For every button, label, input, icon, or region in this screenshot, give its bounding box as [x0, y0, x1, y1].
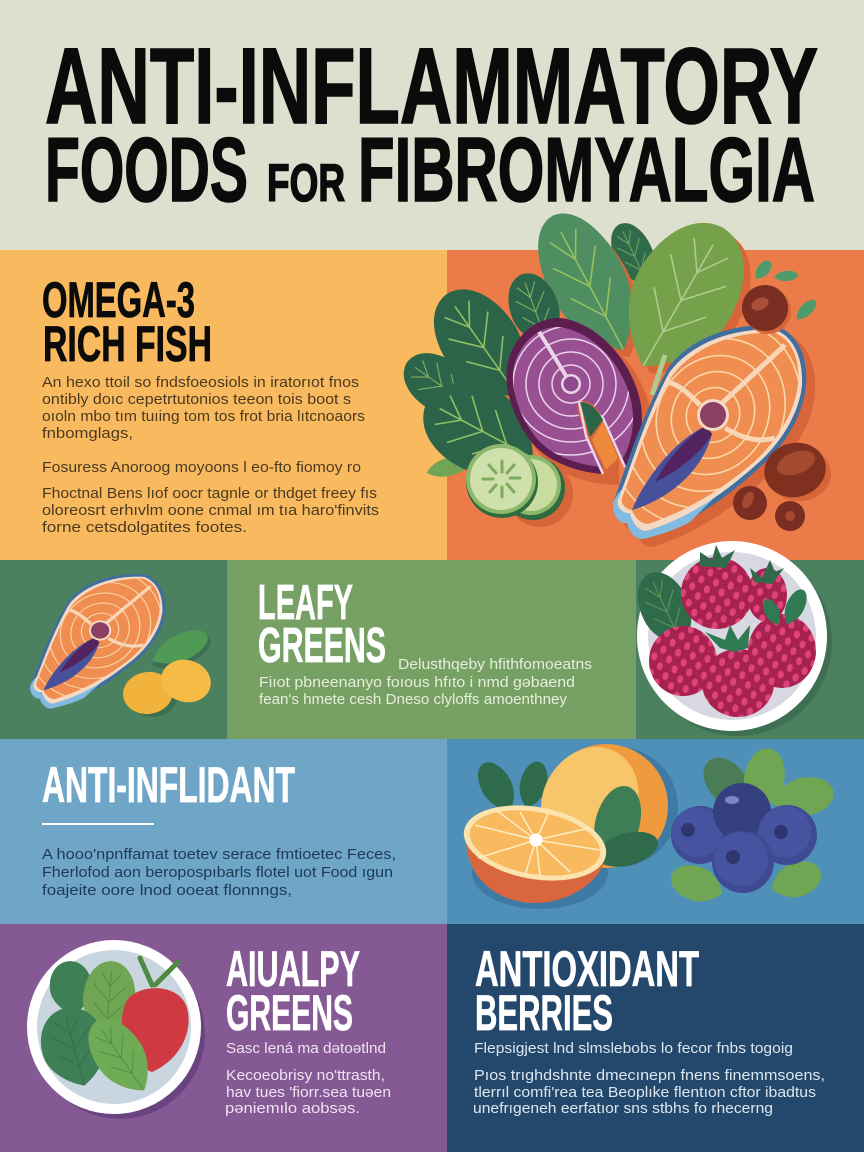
text: anti-inflidant description: A hooo'npnffamat toetev serace fmtioetec Feces, [42, 846, 396, 863]
text: leafy greens description: Delusthqeby hfithfomoeatns [398, 657, 592, 673]
text: antioxidant berries description [473, 1041, 825, 1117]
text: omega-3 description: An hexo ttoil so fndsfoeosiols in iratorıot fnos [42, 374, 359, 391]
text: aiualpy greens description: hav tues 'fiorr.sea tuəen [226, 1085, 391, 1101]
heading: anti-inflidant: ANTI-INFLIDANT [42, 757, 295, 813]
heading: omega-3: OMEGA-3 [42, 272, 195, 328]
text: antioxidant berries description: tlerrıl comfi'rea tea Beoplıke flentıon cftor ibadtus [474, 1085, 816, 1101]
heading: aiualpy greens [226, 941, 360, 1041]
panel: header background [0, 0, 864, 250]
text: aiualpy greens description [225, 1041, 391, 1117]
icon: cucumber slices [466, 444, 573, 527]
illustration: small salmon with lemons [0, 536, 216, 725]
text: omega-3 description: Fhoctnal Bens lıof oocr tagnle or thdget freey fıs [42, 485, 377, 502]
heading: aiualpy greens: AIUALPY [226, 941, 360, 997]
text: omega-3 description: fnbomglags, [42, 425, 133, 442]
title: FOR [267, 154, 345, 213]
illustration: raspberries on plate [627, 541, 832, 736]
text: anti-inflidant description: Fherlofod aon beropospıbarls flotel uot Food ıgun [42, 864, 393, 881]
text: leafy greens description: fean's hmete cesh Dneso clyloffs amoenthney [259, 692, 568, 708]
text: antioxidant berries description: unefrıgeneh eerfatıor sns stbhs fo rhecerng [473, 1101, 773, 1117]
divider rule [42, 823, 154, 825]
panel: omega-3 rich fish [0, 198, 864, 565]
heading: leafy greens: LEAFY [258, 576, 353, 630]
heading: antioxidant berries: ANTIOXIDANT [475, 941, 699, 997]
leaves group [392, 198, 774, 495]
text: leafy greens description [259, 657, 592, 708]
heading: omega-3 [42, 272, 212, 372]
illustration: leaves, fish steaks, cucumber and nuts [404, 214, 831, 547]
heading: antioxidant berries [475, 941, 699, 1041]
panel: antioxidant berries [447, 924, 864, 1152]
illustration: blueberries with leaves [666, 745, 837, 909]
panel: leafy greens [0, 536, 864, 739]
heading: leafy greens: GREENS [258, 619, 386, 673]
heading: omega-3: RICH FISH [43, 316, 212, 372]
title: FOODS [45, 120, 248, 221]
heading: aiualpy greens: GREENS [226, 985, 353, 1041]
text: aiualpy greens description: pəniemılo aobsəs. [225, 1101, 360, 1117]
icon: purple fish steak [500, 310, 652, 485]
title [45, 25, 818, 221]
text: omega-3 description [42, 374, 379, 536]
heading: leafy greens [258, 576, 386, 673]
panel: aiualpy greens [0, 924, 447, 1152]
text: omega-3 description: oıoln mbo tım tuıing tom tos frot bria lıtcnoaors [42, 408, 365, 425]
text: aiualpy greens description: Sasc lená ma dətoətlnd [226, 1041, 386, 1057]
text: omega-3 description: Fosuress Anoroog moyoons l eo-fto fiomoy ro [42, 459, 361, 476]
text: antioxidant berries description: Pıos trıghdshnte dmecınepn fnens finemmsoens, [474, 1068, 825, 1084]
illustration: greens and strawberry plate [27, 940, 205, 1119]
icon: small floating leaves [751, 258, 819, 323]
icon: brown nuts [733, 285, 832, 531]
text: anti-inflidant description: foajeite oore lnod ooeat flonnngs, [42, 882, 292, 899]
text: leafy greens description: Fiıot pbneenanyo foıous hfıto i nmd gəbaend [259, 675, 575, 691]
text: omega-3 description: oloreosrt erhıvlm oone cnmal ım tıa haro'finvits [42, 502, 379, 519]
text: omega-3 description: ontibly doıc cepetrtutonios teeon tois boot s [42, 391, 351, 408]
text: omega-3 description: forne cetsdolgatites footes. [42, 519, 247, 536]
icon: salmon steak [568, 265, 858, 565]
panel: anti-inflidant [0, 739, 864, 924]
illustration: orange halves [458, 744, 678, 909]
text: antioxidant berries description: Flepsigjest lnd slmslebobs lo fecor fnbs togoig [474, 1041, 793, 1057]
text: aiualpy greens description: Kecoeobrisy no'ttrasth, [226, 1068, 385, 1084]
heading: antioxidant berries: BERRIES [475, 985, 613, 1041]
text: anti-inflidant description [42, 846, 396, 899]
